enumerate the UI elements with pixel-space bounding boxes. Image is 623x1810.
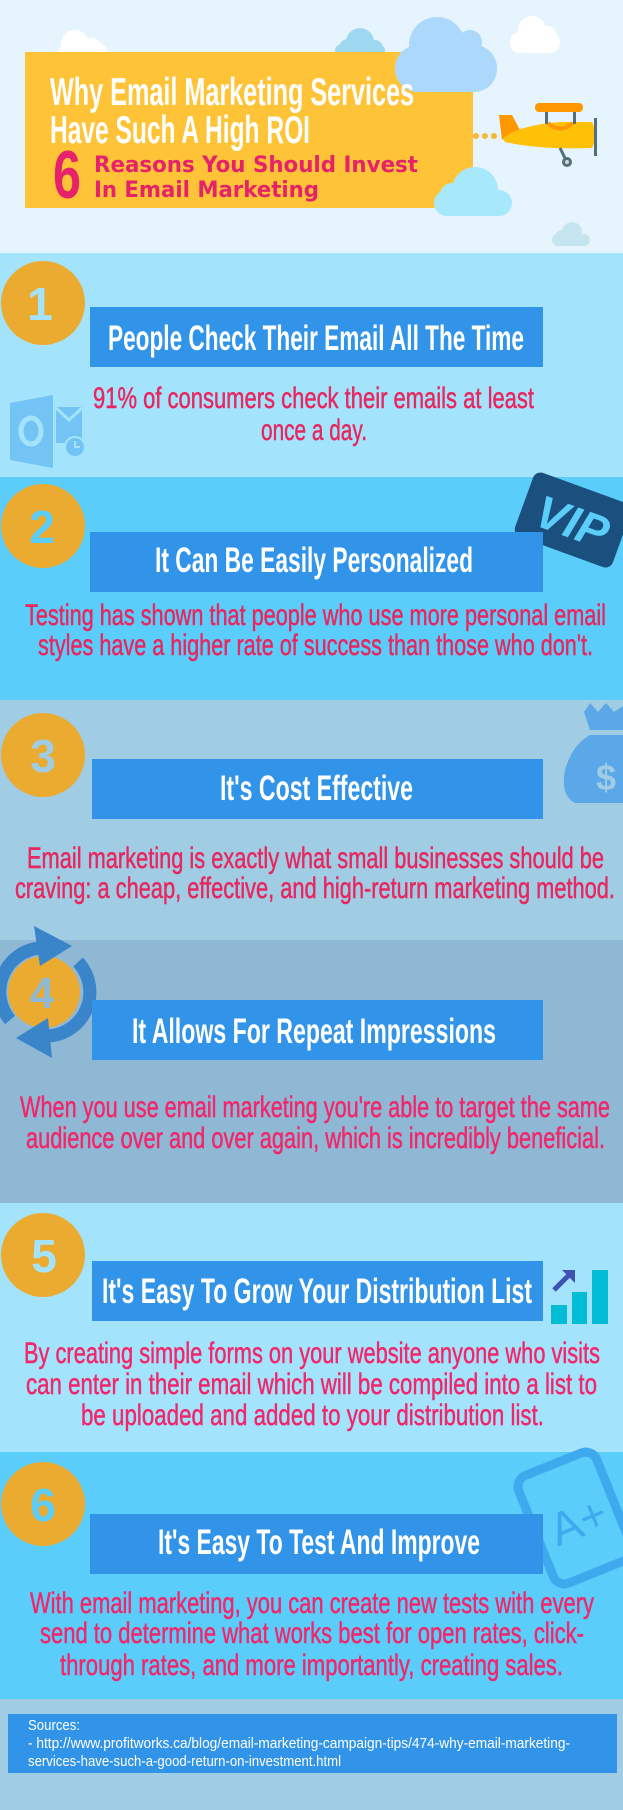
panel: sources footer [0, 1699, 623, 1810]
icon: A+ grade paper [514, 1448, 623, 1588]
body text 3 [15, 842, 615, 905]
icon: money bag: $ [596, 757, 616, 798]
body text 6 [30, 1587, 594, 1682]
heading 5 [92, 1261, 543, 1321]
number badge 2: 2 [29, 501, 55, 553]
panel: header [0, 0, 623, 253]
number badge 3 [1, 713, 85, 797]
icon: A+ grade paper: A+ [542, 1486, 615, 1556]
subtitle: In Email Marketing [94, 178, 319, 203]
number badge 5 [1, 1213, 85, 1297]
sources text: services-have-such-a-good-return-on-investment.html [28, 1753, 341, 1770]
icon: money bag [564, 703, 623, 803]
body text 4 [20, 1091, 610, 1155]
sources box [8, 1714, 617, 1773]
sources text: - http://www.profitworks.ca/blog/email-marketing-campaign-tips/474-why-email-marketing- [28, 1735, 570, 1752]
sources text [28, 1717, 570, 1770]
cloud: big blue [395, 17, 497, 92]
cloud: white left [58, 30, 108, 62]
number badge 6 [1, 1462, 85, 1546]
title text [50, 71, 414, 152]
icon: outlook [10, 395, 85, 468]
panel: reason 4 [0, 926, 623, 1203]
heading 4 [92, 1000, 543, 1060]
icon: VIP badge [513, 470, 623, 570]
icon: growth chart [551, 1270, 608, 1324]
body text 5 [24, 1337, 600, 1432]
number badge 5: 5 [31, 1230, 57, 1282]
icon: VIP badge: VIP [529, 485, 616, 559]
number badge 3: 3 [30, 730, 56, 782]
icon: refresh arrows with number 4: 4 [30, 969, 55, 1018]
panel: reason 2 [0, 470, 623, 700]
panel: reason 3 [0, 700, 623, 940]
heading 3: It's Cost Effective [220, 769, 413, 808]
yellow title box [25, 52, 473, 208]
subtitle: 6 [53, 137, 81, 213]
body text 1 [93, 382, 534, 447]
panel: reason 5 [0, 1203, 623, 1452]
subtitle: Reasons You Should Invest [94, 153, 418, 178]
panel: reason 1 [0, 253, 623, 477]
panel: reason 6 [0, 1448, 623, 1699]
subtitle [53, 137, 418, 213]
icon: refresh arrows with number 4 [0, 926, 90, 1058]
number badge 2 [1, 484, 85, 568]
cloud: white right [510, 16, 560, 53]
heading 2 [90, 532, 543, 592]
body text 2 [25, 599, 606, 662]
heading 3 [92, 759, 543, 819]
icon: airplane [473, 103, 597, 167]
body text 1: once a day. [261, 414, 367, 447]
number badge 6: 6 [30, 1479, 56, 1531]
number badge 1: 1 [27, 278, 53, 330]
cloud: bottom light [434, 167, 512, 216]
cloud: small blue [335, 28, 385, 58]
title text: Why Email Marketing Services [50, 71, 414, 114]
cloud: tiny [552, 222, 590, 246]
heading 1 [90, 307, 543, 367]
title text: Have Such A High ROI [50, 109, 310, 152]
sources text: Sources: [28, 1717, 80, 1734]
number badge 1 [1, 261, 85, 345]
heading 6 [90, 1514, 543, 1574]
